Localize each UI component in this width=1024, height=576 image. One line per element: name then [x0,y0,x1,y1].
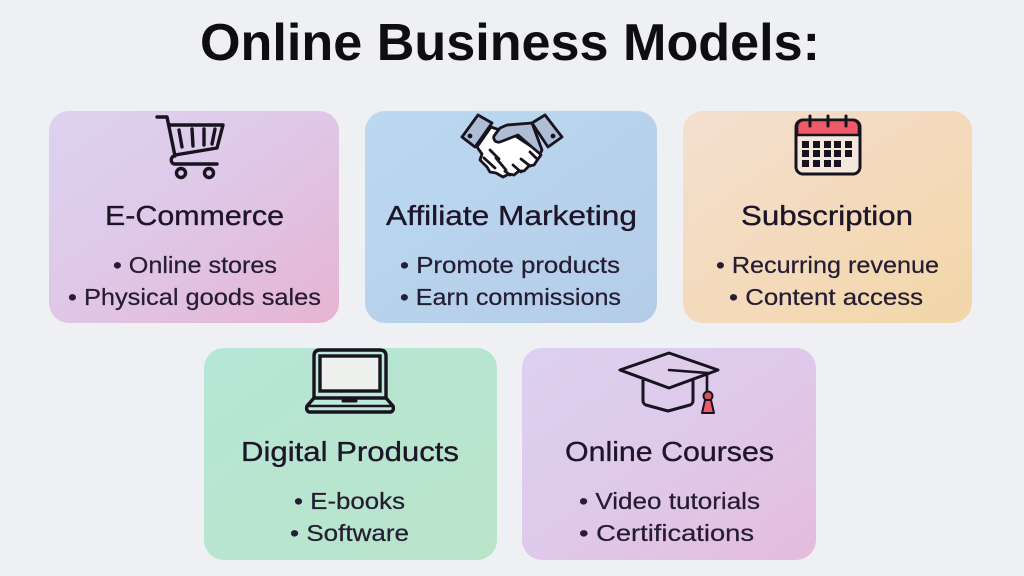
panel: Subscription [683,111,972,323]
bullet: Earn commissions: • Earn commissions [400,284,621,310]
panel: E-Commerce [49,111,339,323]
bullet: Recurring revenue: • Recurring revenue [716,252,939,278]
panel: Affiliate Marketing [365,111,657,323]
heading: Subscription: Subscription [741,200,913,231]
heading: Affiliate Marketing: Affiliate Marketing [386,200,637,231]
heading: Digital Products: Digital Products [241,436,459,467]
panel: Digital Products [204,348,497,560]
bullet: E-books: • E-books [294,488,405,514]
panel: Online Courses [522,348,816,560]
bullet: Online stores: • Online stores [113,252,277,278]
icon: graduation cap [620,353,718,413]
icon: handshake [462,115,562,177]
title: Online Business Models: [200,14,820,72]
icon: shopping cart [157,117,223,178]
icon: laptop [307,350,393,412]
bullet: Software: • Software [290,520,409,546]
bullet: Video tutorials: • Video tutorials [579,488,760,514]
heading: E-Commerce: E-Commerce [105,200,284,231]
icon: calendar [796,116,860,174]
bullet: Promote products: • Promote products [400,252,620,278]
bullet: Physical goods sales: • Physical goods sales [68,284,321,310]
heading: Online Courses: Online Courses [565,436,774,467]
bullet: Content access: • Content access [729,284,923,310]
bullet: Certifications: • Certifications [579,520,754,546]
